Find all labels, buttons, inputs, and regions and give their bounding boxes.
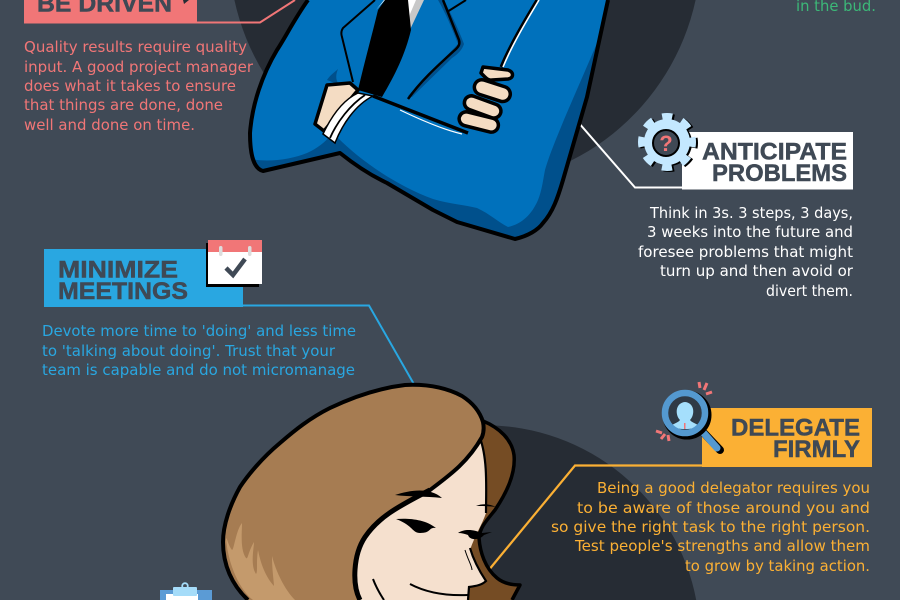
text: be driven: does what it takes to ensure xyxy=(24,77,236,95)
back hair outline xyxy=(479,421,520,600)
lapel right xyxy=(408,0,459,99)
shirt cuff xyxy=(323,93,373,143)
heading: anticipate problems xyxy=(682,132,853,190)
suit outline xyxy=(250,0,608,239)
back hair fill xyxy=(462,421,520,600)
connector: anticipate problems xyxy=(578,122,684,188)
shirt collar xyxy=(376,0,420,36)
face xyxy=(355,440,486,600)
cuff stripe xyxy=(330,95,365,138)
left hand xyxy=(315,83,358,131)
text: minimize meetings xyxy=(42,322,356,379)
heading: be driven xyxy=(24,0,197,24)
heading: anticipate problems: ANTICIPATE xyxy=(702,138,847,166)
text: be driven: that things are done, done xyxy=(24,96,223,114)
sleeve highlight xyxy=(501,0,537,67)
illustration: man in blue suit xyxy=(245,0,640,240)
text: anticipate problems: Think in 3s. 3 steps, 3 days, xyxy=(649,204,853,222)
text: anticipate problems: foresee problems that might xyxy=(638,243,853,261)
cheek line xyxy=(373,579,384,600)
text: be driven xyxy=(24,38,254,134)
icon: gear with question mark: ? xyxy=(659,131,673,156)
icon: clipboard xyxy=(160,583,212,600)
heading: delegate firmly: DELEGATE xyxy=(731,414,860,442)
lapel notch xyxy=(447,0,466,12)
hair highlights xyxy=(226,523,295,600)
heading: delegate firmly xyxy=(702,408,872,467)
connector: delegate firmly xyxy=(488,466,704,571)
face outline xyxy=(468,438,486,600)
connector: minimize meetings xyxy=(243,306,415,386)
icon: magnifier with person xyxy=(656,382,720,450)
dark circle behind man xyxy=(234,0,696,186)
text: delegate firmly: to grow by taking action. xyxy=(685,557,870,575)
heading: minimize meetings: MINIMIZE xyxy=(58,256,178,284)
suit body xyxy=(250,0,608,239)
fingers xyxy=(458,67,512,134)
text: delegate firmly: to be aware of those around you and xyxy=(577,499,870,517)
forearm line xyxy=(373,96,468,133)
illustration: woman xyxy=(223,385,520,600)
dark circle behind woman xyxy=(274,425,696,600)
text: delegate firmly: Test people's strengths and allow them xyxy=(574,537,870,555)
nose line xyxy=(465,550,472,570)
text: minimize meetings: team is capable and do not micromanage xyxy=(42,361,355,379)
text: be driven: well and done on time. xyxy=(24,116,195,134)
eyebrow left xyxy=(395,490,442,498)
tie xyxy=(358,0,411,97)
text: delegate firmly: so give the right task to the right person. xyxy=(551,518,870,536)
text: anticipate problems: turn up and then avoid or xyxy=(660,262,854,280)
heading: anticipate problems: PROBLEMS xyxy=(712,160,847,187)
lapel left xyxy=(341,0,375,82)
heading: minimize meetings xyxy=(44,249,243,307)
suit shading xyxy=(256,0,596,237)
mouth xyxy=(410,584,468,595)
connector: be driven xyxy=(197,0,295,22)
text: anticipate problems xyxy=(638,204,854,300)
text: minimize meetings: Devote more time to 'doing' and less time xyxy=(42,322,356,340)
text: anticipate problems: 3 weeks into the future and xyxy=(647,223,853,241)
icon: gear with question mark xyxy=(642,116,694,168)
eyebrow right xyxy=(476,504,496,507)
face left contour xyxy=(355,490,430,600)
text: minimize meetings: to 'talking about doing'. Trust that your xyxy=(42,342,336,360)
text: be driven: input. A good project manager xyxy=(24,58,254,76)
eye left xyxy=(396,519,436,533)
front hair xyxy=(223,385,484,600)
text: anticipate problems: divert them. xyxy=(766,282,853,300)
text: delegate firmly xyxy=(551,479,870,575)
text: be driven: Quality results require quality xyxy=(24,38,247,56)
eye right xyxy=(458,530,492,539)
icon: calendar xyxy=(206,240,262,287)
heading: delegate firmly: FIRMLY xyxy=(773,436,860,463)
heading: minimize meetings: MEETINGS xyxy=(58,278,188,305)
text: delegate firmly: Being a good delegator requires you xyxy=(597,479,870,497)
